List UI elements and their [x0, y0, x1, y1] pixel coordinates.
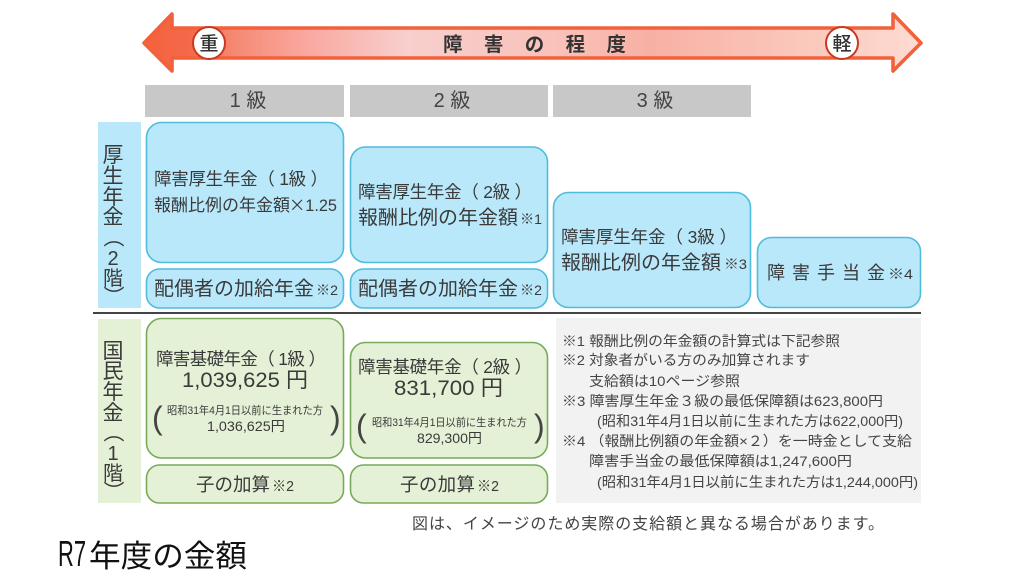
side label: 国民年金 (1階): 民 — [102, 360, 124, 383]
box: 障害厚生年金 3級: ※3 — [724, 256, 747, 272]
side label: 国民年金 (1階): ） — [101, 480, 124, 502]
note 4: 障害手当金の最低保障額は1,247,600円 — [589, 453, 852, 469]
arrow: severity scale — [144, 14, 921, 71]
box: 子の加算 1級: 子の加算 — [196, 474, 270, 495]
arrow title: 障害の程度 — [443, 28, 626, 57]
box: 障害厚生年金 3級: 報酬比例の年金額 — [561, 252, 721, 274]
box: 障害厚生年金 1級: ×1.25 — [289, 192, 337, 216]
grade header: 3級: 3 級 — [637, 89, 673, 112]
box: 障害基礎年金 2級: ) — [534, 408, 545, 444]
box: 障害基礎年金 2級: 障害基礎年金（ 2級 ） — [358, 357, 532, 377]
box: 障害手当金 — [758, 238, 920, 308]
box: 障害基礎年金 1級: 昭和31年4月1日以前に生まれた方 — [167, 403, 323, 417]
side label: 厚生年金 (2階): ） — [101, 286, 124, 306]
grade header: 2級: 2 級 — [434, 89, 470, 112]
panel: footnotes — [556, 318, 921, 503]
box: 配偶者の加給年金 2級 — [350, 269, 548, 308]
side label: 国民年金 (1階): 階 — [103, 462, 123, 485]
note 2: ※2 対象者がいる方のみ加算されます — [562, 352, 810, 368]
side label: 国民年金 (1階): 国 — [102, 340, 124, 363]
divider between tiers — [93, 312, 921, 314]
box: 障害基礎年金 1級: ) — [330, 400, 341, 436]
box: 障害基礎年金 1級: ( — [152, 400, 163, 436]
side label: 国民年金 (1階): 年 — [102, 381, 124, 404]
box: 障害厚生年金 2級: ※1 — [520, 211, 542, 227]
side label: 厚生年金 (2階): 年 — [102, 186, 124, 209]
side label: 国民年金 (1階): （ — [101, 422, 124, 442]
box: 障害厚生年金 1級 — [146, 122, 344, 262]
side label: 厚生年金 (2階): 階 — [103, 267, 123, 290]
box: 障害基礎年金 1級: 障害基礎年金（ 1級 ） — [156, 349, 326, 369]
box: 障害厚生年金 2級 — [350, 147, 548, 262]
side label: 厚生年金 (2階): 生 — [102, 165, 124, 188]
note 3: (昭和31年4月1日以前に生まれた方は622,000円) — [597, 413, 903, 429]
box: 子の加算 2級: ※2 — [477, 478, 499, 495]
box: 障害基礎年金 1級 — [146, 318, 344, 458]
side label: 国民年金 (1階): 金 — [102, 402, 124, 425]
box: 障害基礎年金 1級: 1,036,625円 — [207, 418, 285, 434]
box: 障害基礎年金 2級: 昭和31年4月1日以前に生まれた方 — [372, 415, 527, 429]
box: 配偶者の加給年金 1級 — [146, 269, 344, 308]
box: 子の加算 1級 — [146, 465, 344, 503]
note 3: ※3 障害厚生年金３級の最低保障額は623,800円 — [562, 393, 883, 409]
side label: 国民年金 (1階) — [98, 319, 141, 503]
note 4 — [562, 433, 918, 490]
side label: 厚生年金 (2階): 金 — [102, 206, 124, 229]
box: 障害厚生年金 2級: 報酬比例の年金額 — [358, 207, 518, 229]
side label: 厚生年金 (2階): 2 — [107, 248, 119, 270]
note 4: ※4 （報酬比例額の年金額×２）を一時金として支給 — [562, 433, 912, 449]
box: 障害厚生年金 1級: 報酬比例の年金額 — [154, 196, 290, 215]
caption: R7年度の金額: 年度の金額 — [89, 539, 247, 574]
box: 配偶者の加給年金 2級: ※2 — [520, 282, 542, 298]
box: 障害基礎年金 2級 — [350, 342, 548, 458]
note 2: 支給額は10ページ参照 — [589, 373, 740, 389]
icon: mild marker — [826, 27, 858, 59]
box: 障害手当金: ※4 — [888, 266, 913, 282]
box: 子の加算 1級: ※2 — [272, 478, 294, 495]
box: 子の加算 2級: 子の加算 — [400, 474, 475, 495]
disclaimer: 図は、イメージのため実際の支給額と異なる場合があります。 — [412, 515, 884, 533]
side label: 厚生年金 (2階): （ — [101, 226, 124, 248]
box: 配偶者の加給年金 1級: ※2 — [316, 282, 338, 298]
note 3 — [562, 393, 903, 429]
box: 障害基礎年金 2級: ( — [356, 408, 367, 444]
note 4: (昭和31年4月1日以前に生まれた方は1,244,000円) — [597, 474, 918, 490]
icon: mild marker: 軽 — [832, 29, 852, 56]
note 2 — [562, 352, 810, 389]
box: 障害厚生年金 3級 — [554, 192, 750, 308]
box: 障害厚生年金 2級: 障害厚生年金（ 2級 ） — [358, 182, 532, 202]
box: 障害基礎年金 2級: 831,700 円 — [394, 377, 503, 400]
box: 障害厚生年金 1級: 障害厚生年金（ 1級 ） — [154, 169, 328, 189]
side label: 国民年金 (1階): 1 — [107, 443, 119, 465]
box: 子の加算 2級 — [350, 465, 548, 503]
caption: R7年度の金額: R7 — [58, 533, 86, 574]
side label: 厚生年金 (2階): 厚 — [102, 144, 124, 167]
note 1: ※1 報酬比例の年金額の計算式は下記参照 — [562, 333, 840, 349]
grade header: 2級 — [350, 85, 548, 117]
box: 障害手当金: 障害手当金 — [767, 263, 885, 283]
grade header: 3級 — [553, 85, 751, 117]
box: 障害基礎年金 1級: 1,039,625 円 — [182, 369, 308, 392]
box: 配偶者の加給年金 2級: 配偶者の加給年金 — [358, 278, 518, 300]
box: 障害基礎年金 2級: 829,300円 — [417, 430, 482, 446]
box: 配偶者の加給年金 1級: 配偶者の加給年金 — [154, 278, 314, 300]
icon: severe marker: 重 — [199, 29, 219, 56]
box: 障害厚生年金 3級: 障害厚生年金（ 3級 ） — [561, 227, 737, 247]
icon: severe marker — [193, 27, 225, 59]
side label: 厚生年金 (2階) — [98, 122, 141, 308]
grade header: 1級 — [145, 85, 344, 117]
grade header: 1級: 1 級 — [230, 89, 266, 112]
